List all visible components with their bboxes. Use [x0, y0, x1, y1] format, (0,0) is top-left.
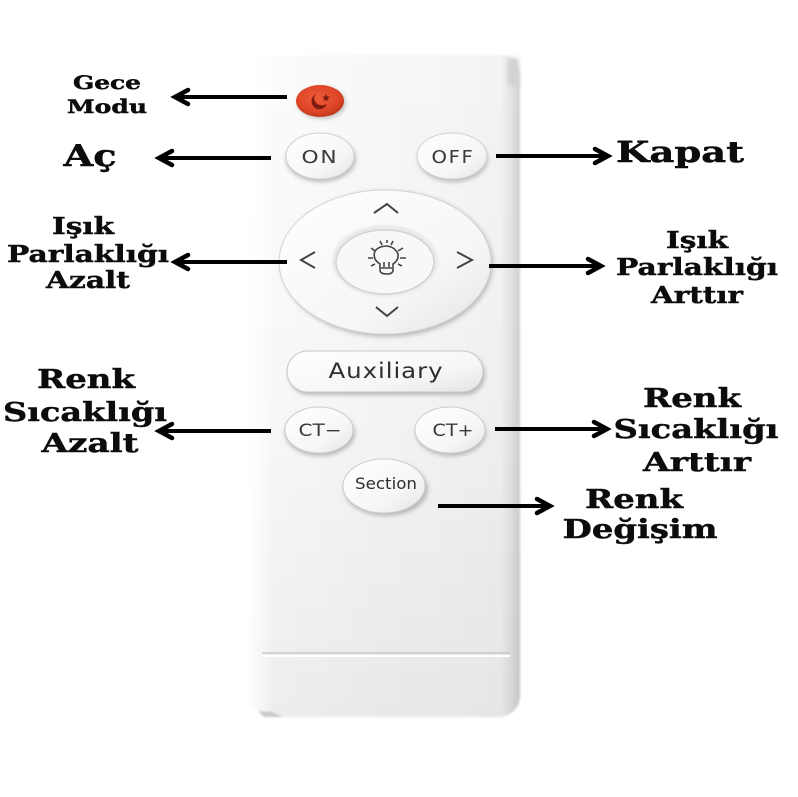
label: Işık Parlaklığı Azalt [7, 213, 169, 294]
arrow: Renk Sıcaklığı Azalt [159, 424, 271, 438]
label: Renk Sıcaklığı Arttır: Renk [643, 384, 742, 414]
CT- button: CT− [298, 421, 342, 441]
label: Renk Sıcaklığı Arttır: Arttır [642, 448, 751, 478]
label: Renk Sıcaklığı Azalt: Renk [37, 365, 136, 395]
remote control body [245, 50, 520, 717]
Section button [343, 459, 428, 516]
ON button [286, 133, 356, 182]
label: Işık Parlaklığı Arttır: Parlaklığı [616, 254, 778, 281]
icon: moon and star [312, 94, 330, 109]
OFF button: OFF [432, 147, 474, 168]
arrow: Işık Parlaklığı Azalt [175, 255, 287, 269]
label: Gece Modu: Gece [73, 72, 141, 94]
label: Işık Parlaklığı Arttır [616, 227, 778, 309]
OFF button [417, 133, 488, 182]
CT+ button [415, 407, 486, 456]
label: Kapat: Kapat [616, 135, 745, 169]
Section button: Section [355, 474, 417, 493]
arrow: Aç [159, 151, 271, 165]
label: Işık Parlaklığı Azalt: Işık [52, 213, 115, 240]
label: Işık Parlaklığı Arttır: Arttır [650, 282, 744, 309]
CT+ button: CT+ [432, 421, 474, 441]
CT- button [285, 407, 355, 456]
arrow: Gece Modu [175, 90, 287, 104]
label: Renk Sıcaklığı Azalt [3, 365, 167, 459]
label: Gece Modu [67, 72, 147, 118]
label: Renk Sıcaklığı Azalt: Azalt [40, 429, 138, 459]
arrow: Renk Değişim [438, 499, 550, 513]
label: Işık Parlaklığı Azalt: Parlaklığı [7, 241, 169, 268]
icon: light bulb [368, 240, 406, 274]
Auxiliary button: Auxiliary [328, 359, 444, 383]
ON button: ON [302, 147, 338, 168]
arrow: Renk Sıcaklığı Arttır [495, 422, 607, 436]
arrow: Kapat [496, 149, 608, 163]
label: Renk Sıcaklığı Arttır [614, 384, 779, 478]
Auxiliary button [287, 351, 485, 395]
label: Renk Değişim: Renk [585, 485, 684, 515]
directional pad [279, 190, 493, 337]
label: Gece Modu: Modu [67, 96, 147, 118]
label: Renk Sıcaklığı Arttır: Sıcaklığı [614, 415, 779, 445]
battery cover seam [262, 653, 510, 656]
label: Işık Parlaklığı Azalt: Azalt [45, 267, 130, 294]
label: Aç: Aç [62, 139, 116, 174]
label: Işık Parlaklığı Arttır: Işık [666, 227, 729, 254]
label: Renk Değişim: Değişim [562, 515, 718, 545]
arrow: Işık Parlaklığı Arttır [489, 259, 601, 273]
label: Renk Değişim [562, 485, 718, 545]
night mode button [296, 85, 346, 119]
d-pad arrows [301, 204, 472, 316]
label: Renk Sıcaklığı Azalt: Sıcaklığı [3, 398, 167, 428]
